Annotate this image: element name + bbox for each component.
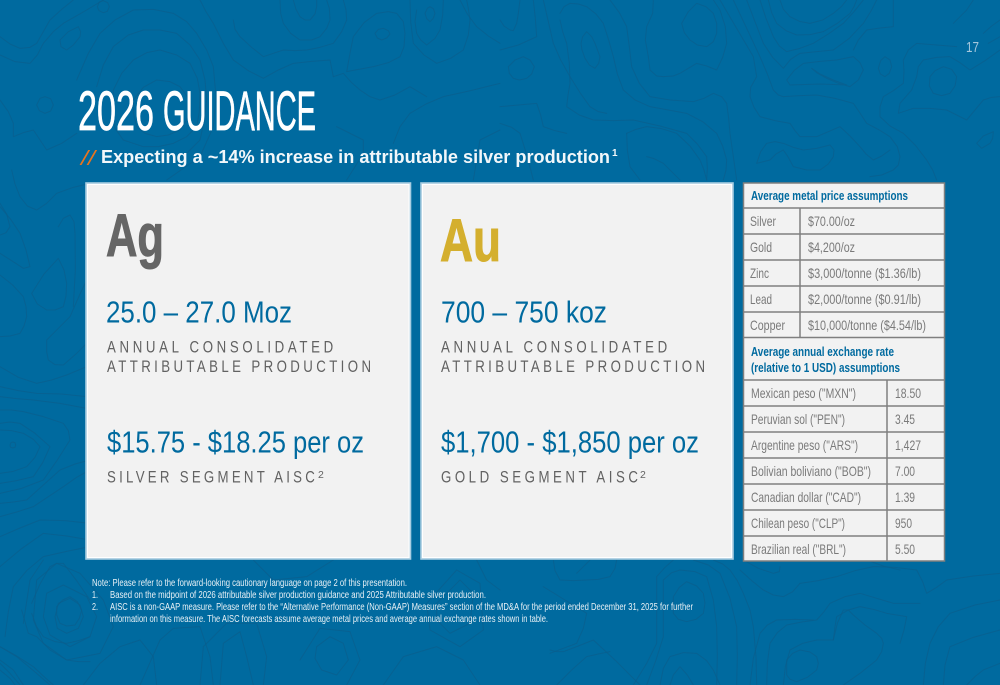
footnotes: 1.	[92, 590, 98, 601]
gold AISC label: 2	[640, 469, 646, 481]
metal price rows: $2,000/tonne ($0.91/lb)	[808, 291, 921, 307]
silver AISC range: $15.75 - $18.25 per oz	[107, 424, 364, 460]
table heading: exchange rates	[751, 344, 900, 375]
metal price rows: $3,000/tonne ($1.36/lb)	[808, 265, 921, 281]
subtitle: //	[78, 148, 98, 170]
exchange rate rows: 1.39	[895, 489, 915, 505]
gold AISC range: $1,700 - $1,850 per oz	[441, 424, 699, 460]
gold production label: ATTRIBUTABLE PRODUCTION	[441, 358, 705, 376]
silver production label: ANNUAL CONSOLIDATED	[107, 338, 333, 357]
exchange rate rows: Peruvian sol ("PEN")	[751, 411, 845, 427]
metal price rows: Silver	[750, 213, 776, 229]
exchange rate rows: 7.00	[895, 463, 915, 479]
silver AISC label: 2	[318, 469, 324, 481]
metal price rows: Copper	[750, 317, 785, 333]
metal price rows: Lead	[750, 291, 772, 307]
metal price rows: $70.00/oz	[808, 213, 855, 229]
title	[78, 79, 316, 142]
metal price rows: Zinc	[750, 265, 769, 281]
exchange rate rows: Mexican peso ("MXN")	[751, 385, 856, 401]
table: assumptions	[743, 183, 945, 561]
metal price rows: $4,200/oz	[808, 239, 855, 255]
metal price rows: Gold	[750, 239, 772, 255]
footnotes: information on this measure. The AISC forecasts assume average metal prices and average annual exchange rates shown in table.	[110, 614, 548, 625]
footnotes: Note: Please refer to the forward-looking cautionary language on page 2 of this presentation.	[92, 578, 407, 589]
panel: gold guidance	[421, 183, 733, 559]
footnotes	[92, 578, 694, 625]
subtitle: Expecting a ~14% increase in attributable silver production	[101, 147, 610, 167]
footnotes: AISC is a non-GAAP measure. Please refer to the “Alternative Performance (Non-GAAP) Measures” section of the MD&A for the period ended December 31, 2025 for further	[110, 602, 694, 613]
exchange rate rows: 18.50	[895, 385, 921, 401]
gold symbol: Au	[440, 207, 501, 274]
gold production label: ANNUAL CONSOLIDATED	[441, 338, 667, 357]
panel: silver guidance	[86, 183, 410, 559]
title: GUIDANCE	[163, 79, 316, 142]
exchange rate rows: Argentine peso ("ARS")	[751, 437, 858, 453]
exchange rate rows: 5.50	[895, 541, 915, 557]
silver symbol: Ag	[106, 202, 164, 269]
exchange rate rows: 1,427	[895, 437, 921, 453]
footnotes: 2.	[92, 602, 98, 613]
table heading: metal prices: Average metal price assumptions	[751, 188, 908, 203]
silver production label: ATTRIBUTABLE PRODUCTION	[107, 358, 371, 376]
table heading: exchange rates: (relative to 1 USD) assumptions	[751, 360, 900, 375]
exchange rate rows: Canadian dollar ("CAD")	[751, 489, 861, 505]
exchange rate rows: Bolivian boliviano ("BOB")	[751, 463, 871, 479]
silver AISC label: SILVER SEGMENT AISC	[107, 468, 315, 487]
metal price rows	[750, 213, 926, 333]
exchange rate rows: 950	[895, 515, 912, 531]
exchange rate rows: 3.45	[895, 411, 915, 427]
silver production range: 25.0 – 27.0 Moz	[106, 294, 292, 330]
exchange rate rows	[751, 385, 921, 557]
gold production label	[441, 338, 705, 376]
gold production range: 700 – 750 koz	[441, 294, 607, 330]
title: 2026	[78, 79, 154, 142]
metal price rows: $10,000/tonne ($4.54/lb)	[808, 317, 926, 333]
exchange rate rows: Brazilian real ("BRL")	[751, 541, 846, 557]
footnotes: Based on the midpoint of 2026 attributable silver production guidance and 2025 Attributable silver production.	[110, 590, 486, 601]
table heading: exchange rates: Average annual exchange rate	[751, 344, 894, 359]
page number: 17	[966, 39, 979, 56]
gold AISC label: GOLD SEGMENT AISC	[441, 468, 638, 487]
exchange rate rows: Chilean peso ("CLP")	[751, 515, 845, 531]
subtitle: 1	[612, 148, 618, 159]
silver production label	[107, 338, 371, 376]
